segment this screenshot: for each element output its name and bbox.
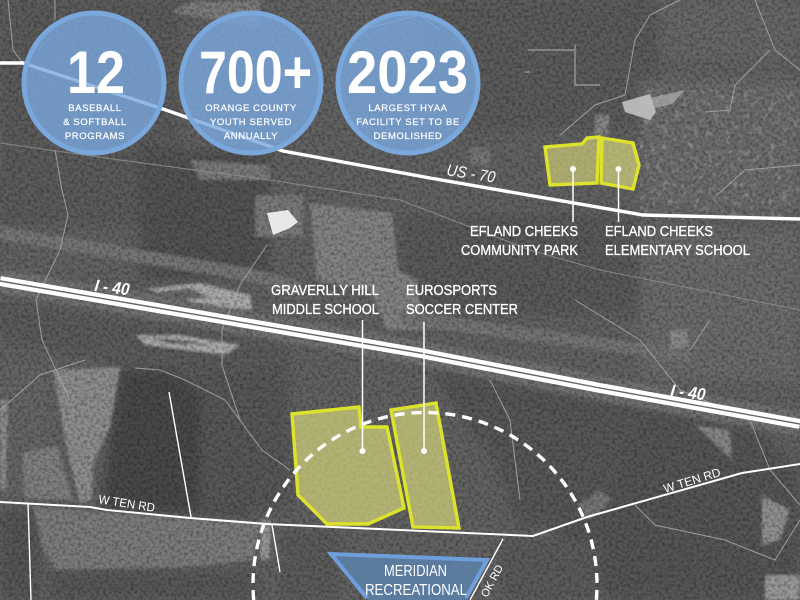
stat circle: 12 programs xyxy=(24,13,164,153)
label: Efland Cheeks Elementary School: ELEMENTARY SCHOOL xyxy=(605,243,750,259)
label: partial road name: OK RD xyxy=(479,563,506,599)
leader: middle school xyxy=(360,320,366,454)
stat circle: 12 programs: BASEBALL xyxy=(68,103,122,114)
road: W Ten Rd xyxy=(0,464,800,536)
leader: park xyxy=(570,166,576,222)
stat circle: 12 programs: 12 xyxy=(67,39,125,106)
white utility lines xyxy=(28,392,503,600)
Meridian Recreational trapezoid xyxy=(329,552,490,600)
dashed radius circle xyxy=(253,412,597,600)
leader: elementary school xyxy=(616,166,622,222)
leader: soccer center xyxy=(421,322,427,454)
label: I-40 west: I - 40 xyxy=(94,276,131,299)
label: Eurosports Soccer Center: EUROSPORTS xyxy=(406,283,497,299)
stat circle: 12 programs: & SOFTBALL xyxy=(63,117,127,128)
site: Eurosports Soccer Center xyxy=(391,403,459,528)
stat circle: 700+ youth: ANNUALLY xyxy=(224,131,278,142)
label: Graverlly Hill Middle School: GRAVERLLY HILL xyxy=(271,283,379,299)
label: Efland Cheeks Community Park: EFLAND CHEEKS xyxy=(470,224,578,240)
road: US-70 xyxy=(0,63,800,219)
label: W Ten Rd west: W TEN RD xyxy=(98,492,156,515)
stat circle: 2023 facility: 2023 xyxy=(347,39,468,106)
building: white warehouse xyxy=(267,210,298,235)
stat circle: 700+ youth: YOUTH SERVED xyxy=(210,117,292,128)
stat circle: 12 programs: PROGRAMS xyxy=(65,131,125,142)
label: Graverlly Hill Middle School xyxy=(271,283,379,318)
label: Efland Cheeks Community Park xyxy=(461,224,578,259)
light fields xyxy=(53,367,120,503)
stat circle: 2023 facility: LARGEST HYAA xyxy=(368,103,448,114)
label: W Ten Rd east: W TEN RD xyxy=(662,465,723,496)
stat circle: 2023 facility: FACILITY SET TO BE xyxy=(356,117,460,128)
label: Graverlly Hill Middle School: MIDDLE SCHOOL xyxy=(272,302,379,318)
label: Efland Cheeks Elementary School xyxy=(605,224,750,259)
Meridian Recreational trapezoid: MERIDIAN xyxy=(384,563,447,580)
label: Eurosports Soccer Center xyxy=(406,283,518,318)
label: Efland Cheeks Elementary School: EFLAND CHEEKS xyxy=(605,224,713,240)
label: I-40 east: I - 40 xyxy=(670,381,707,404)
stat circle: 700+ youth xyxy=(181,13,321,153)
label: Efland Cheeks Community Park: COMMUNITY PARK xyxy=(461,243,578,259)
site: Graverlly Hill Middle School xyxy=(292,407,404,524)
site: Efland Cheeks Elementary School xyxy=(601,138,639,189)
label: US-70: US - 70 xyxy=(445,162,497,187)
stat circle: 700+ youth: 700+ xyxy=(199,39,312,106)
label: Eurosports Soccer Center: SOCCER CENTER xyxy=(406,302,518,318)
stat circle: 2023 facility: DEMOLISHED xyxy=(374,131,442,142)
stat circle: 700+ youth: ORANGE COUNTY xyxy=(205,103,297,114)
Meridian Recreational trapezoid: RECREATIONAL xyxy=(365,582,467,599)
stat circle: 2023 facility xyxy=(338,13,478,153)
site: Efland Cheeks Community Park xyxy=(545,137,599,185)
road: I-40 xyxy=(0,281,800,424)
mobile home park xyxy=(622,90,685,120)
